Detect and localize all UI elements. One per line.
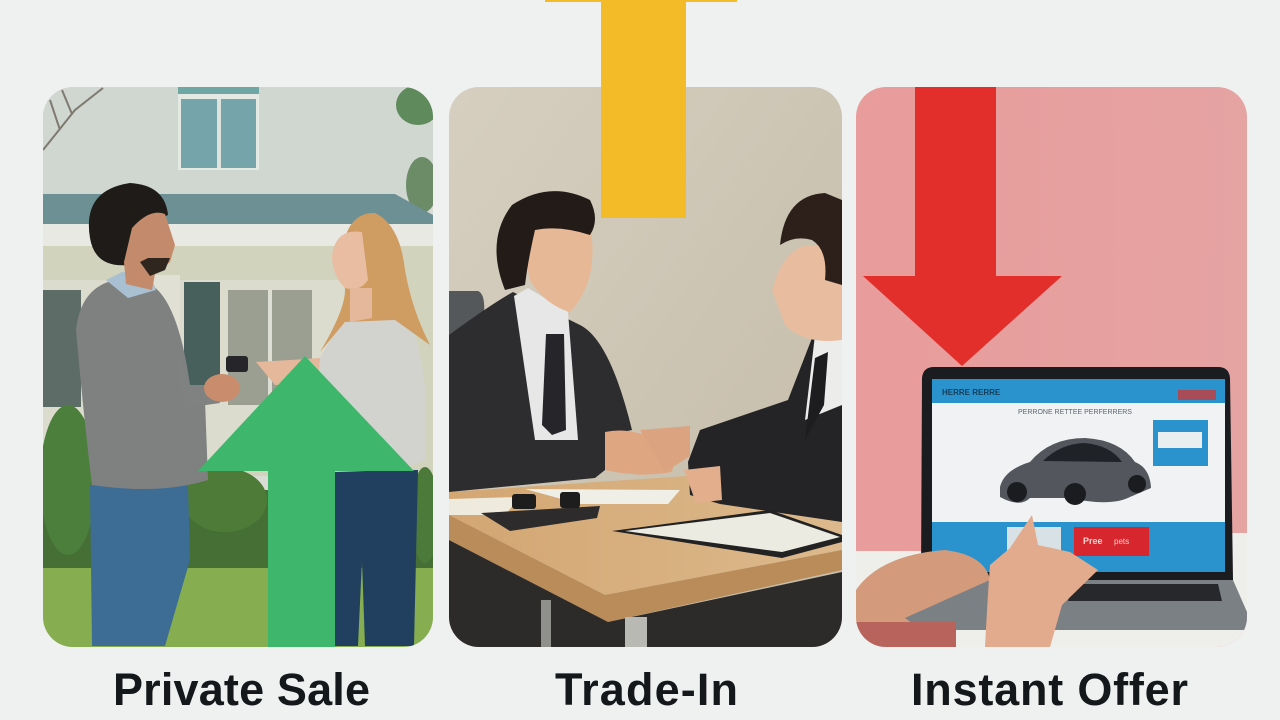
screen buttons [1007,527,1149,556]
screen header text [942,389,1216,414]
panel: trade-in photo [449,87,842,647]
porch windows [43,275,312,415]
laptop screen [932,403,1225,522]
label: trade-in: Trade-In [555,664,738,715]
car keys [226,356,248,372]
left man [449,191,676,492]
woman [256,213,430,646]
hedge [40,405,439,568]
house window [178,87,259,170]
screen header text: PERRONE RETTEE PERFERRERS [1018,409,1132,416]
tree branches and foliage [43,85,440,213]
keyboard base [890,580,1247,630]
laptop [890,367,1247,630]
arrow: red down [863,87,1062,366]
table [449,470,842,622]
screen header text: HERRE RERRE [942,388,1001,397]
arrow: yellow sideways top [545,0,737,218]
arrow: up green [198,356,414,647]
porch roof [43,194,433,226]
screen car [1000,438,1151,505]
papers and keys on table [449,489,842,558]
right man [640,193,842,522]
lawn [43,568,433,647]
house upper wall [43,87,433,202]
hands [856,515,1098,647]
table underside shadows [449,540,842,647]
screen buttons: Pree [1083,536,1103,546]
chair [449,291,484,335]
label: private sale: Private Sale [113,664,370,715]
panel: instant offer photo [856,87,1247,647]
man [76,183,240,646]
panel: private sale photo [40,85,440,647]
screen offer card [1153,420,1208,466]
desk [856,533,1247,647]
label: instant offer: Instant Offer [911,664,1188,715]
screen buttons: pets [1114,537,1129,546]
lower wall [43,246,433,476]
